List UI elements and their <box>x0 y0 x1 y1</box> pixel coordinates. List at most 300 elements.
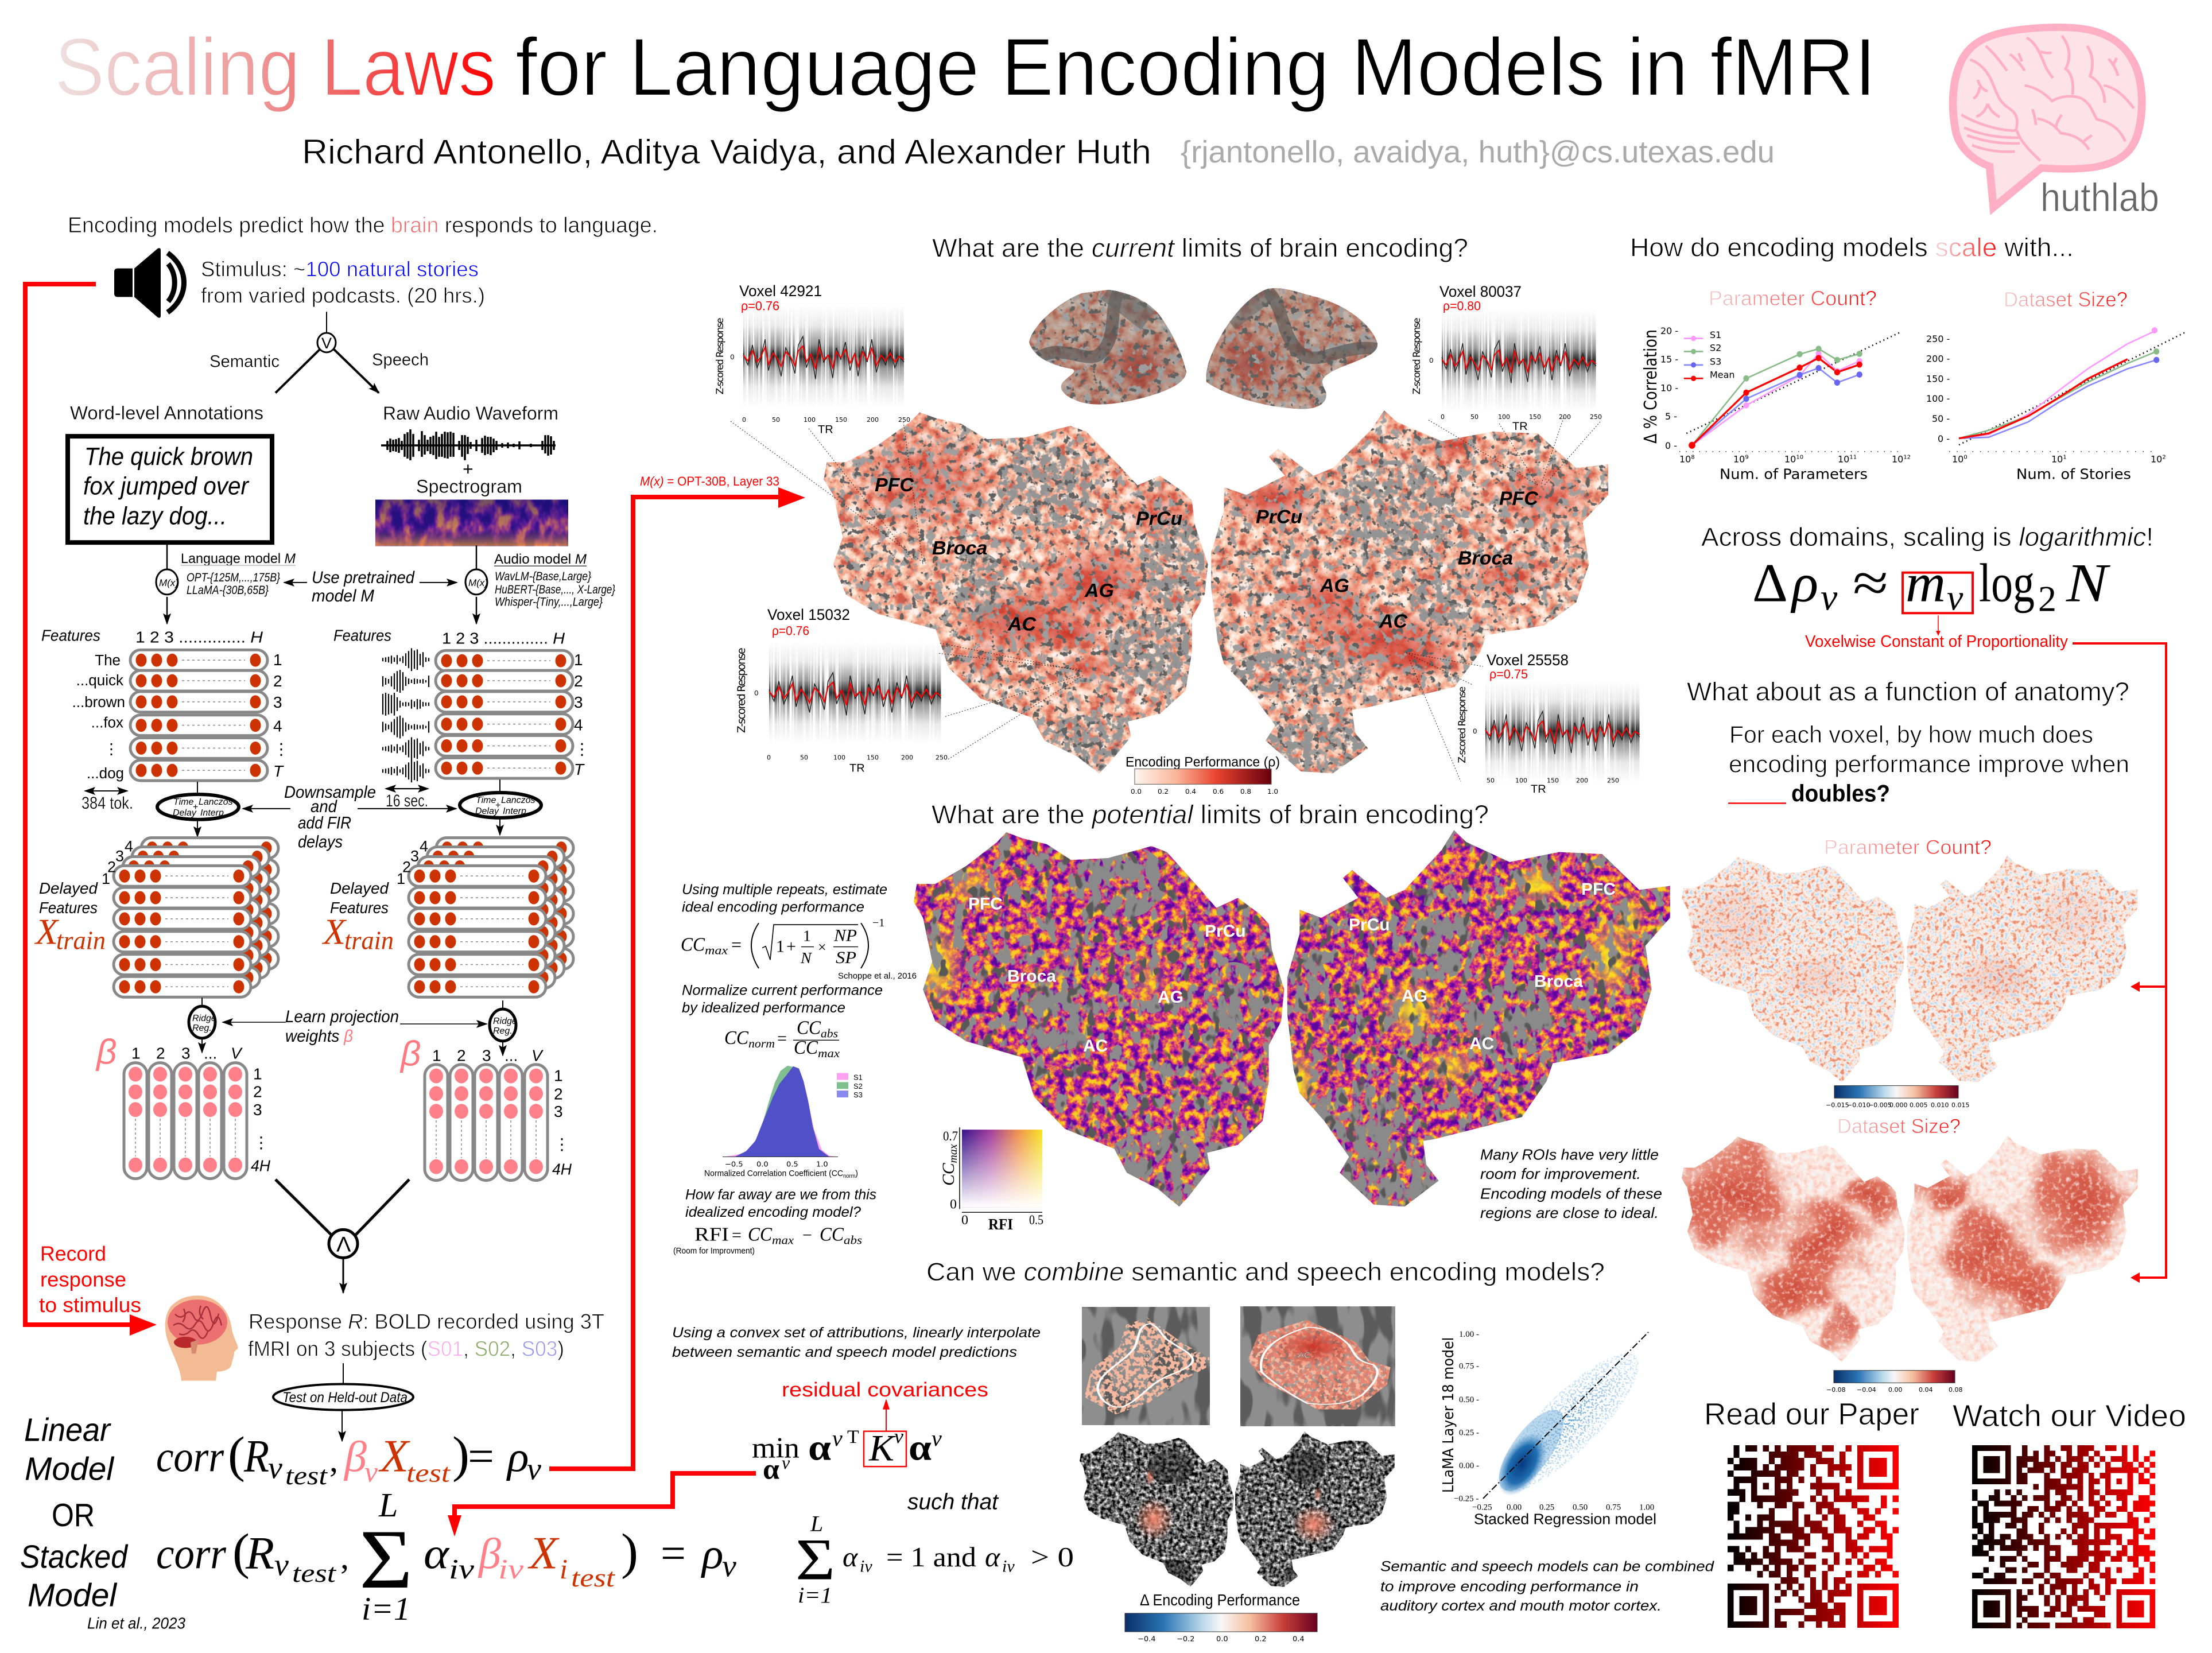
formula: CCmax: CC <box>681 934 705 955</box>
text: ideal encoding performance: Using multiple repeats, estimate <box>682 882 887 898</box>
model labels: Lin et al., 2023 <box>87 1615 186 1632</box>
note: many ROIs: Encoding models of these <box>1480 1186 1662 1202</box>
panel: language features matrix: 1 2 3 .............. H <box>135 628 263 646</box>
heading: spectrogram: Spectrogram <box>416 476 522 497</box>
inflated brain left <box>1029 289 1186 405</box>
panel: language features matrix: Features <box>41 626 100 644</box>
text: ideal encoding performance <box>682 882 887 915</box>
audio model node <box>465 545 488 624</box>
chart title: dataset size: Dataset Size? <box>2004 288 2128 311</box>
time delay node right: Lanczos <box>501 796 535 805</box>
voxel plot 15032: ρ=0.76 <box>772 624 809 638</box>
constraint formula: > 0 <box>1031 1541 1074 1573</box>
optimization objective: T <box>847 1427 859 1448</box>
voxel plot 80037: Voxel 80037 <box>1439 283 1522 300</box>
panel: audio features matrix: 1 2 3 .............. H <box>442 629 565 647</box>
auditory cortex close-up right: AC <box>1298 1351 1310 1360</box>
scatter plot: stacked vs LLaMA: −0.25 <box>1472 1503 1492 1512</box>
colorbar: encoding performance: 0.2 <box>1158 787 1169 796</box>
optimization objective: v <box>932 1426 942 1451</box>
colorbar: parameter count: 0.010 <box>1931 1101 1949 1109</box>
colorbar: parameter count: −0.015 <box>1826 1101 1849 1109</box>
scatter plot: stacked vs LLaMA <box>1440 1330 1656 1528</box>
equation: stacked model: ρ <box>701 1529 723 1578</box>
histogram: normalized correlation: S3 <box>853 1091 863 1099</box>
panel: delayed features right: Features <box>330 899 389 917</box>
formula: CCmax: + <box>786 937 796 956</box>
line chart: dataset size: 50 - <box>1932 413 1950 424</box>
panel: delayed features right: 2 <box>402 858 411 875</box>
panel: delayed features left: 2 <box>107 858 116 875</box>
equation: scaling law: N <box>2066 553 2111 613</box>
voxelwise constant label: Voxelwise Constant of Proportionality <box>1805 633 2069 651</box>
flatmap: dataset size scaling <box>1663 1127 2146 1366</box>
use pretrained model callout <box>284 568 457 606</box>
learn projection callout <box>223 1007 487 1046</box>
histogram: normalized correlation: 0.0 <box>756 1160 769 1169</box>
text: convex attributions: between semantic and speech model predictions <box>672 1344 1017 1360</box>
colorbar: dataset size: −0.04 <box>1857 1386 1876 1394</box>
line chart: parameter count: 10 <box>1838 454 1849 465</box>
scatter plot: stacked vs LLaMA: 0.50 <box>1573 1503 1588 1512</box>
voxel plot 15032: 0 <box>754 689 759 697</box>
formula: CCmax: = <box>731 935 742 954</box>
voxel plot 80037: 250 <box>1590 413 1602 421</box>
region labels: PrCu <box>1136 507 1183 529</box>
equation: stacked model: v <box>722 1549 736 1584</box>
panel: audio features matrix: Features <box>333 626 391 644</box>
voxel plot 25558 <box>1456 651 1640 796</box>
line chart: dataset size: 1 <box>2063 455 2067 461</box>
white region labels: AC <box>1469 1034 1494 1053</box>
text: per-voxel question: For each voxel, by how much does <box>1729 721 2093 748</box>
region labels: PrCu <box>1256 506 1303 527</box>
formula: CCnorm: CC <box>794 1037 818 1058</box>
audio model list: HuBERT-{Base,..., X-Large} <box>495 583 615 596</box>
panel: beta weights right: 1 <box>554 1067 563 1084</box>
white region labels: PrCu <box>1349 915 1390 934</box>
panel: beta weights right: ... <box>505 1047 518 1065</box>
voxel plot 42921: 250 <box>898 416 910 424</box>
line chart: parameter count: 10 <box>1784 454 1796 465</box>
learn projection callout: weights β <box>285 1027 353 1046</box>
formula: RFI: RFI <box>694 1224 729 1245</box>
line chart: dataset size: 10 <box>2051 454 2063 465</box>
line chart: dataset size: 250 - <box>1926 333 1950 344</box>
panel: audio features matrix: 4 <box>574 716 583 734</box>
voxel plot 15032: 0 <box>767 754 771 762</box>
formula: CCnorm: CC <box>724 1027 748 1049</box>
voxel plot 80037: TR <box>1512 420 1528 433</box>
line chart: parameter count: 8 <box>1691 455 1695 461</box>
voxel plot 80037: 150 <box>1529 413 1541 421</box>
panel: beta weights right: 2 <box>457 1047 466 1065</box>
voxel plot 42921: ρ=0.76 <box>741 299 779 313</box>
stimulus description: Stimulus: ~100 natural stories <box>201 258 479 281</box>
line chart: parameter count: 10 <box>1892 454 1903 465</box>
note: many ROIs: Many ROIs have very little <box>1480 1147 1659 1163</box>
downsample callout: add FIR <box>298 814 351 833</box>
voxel plot 42921: Z-scored Response <box>714 317 725 394</box>
line chart: dataset size: 100 - <box>1926 393 1950 404</box>
panel: language features matrix: 3 <box>273 693 282 711</box>
equation: stacked model: Σ <box>359 1513 413 1607</box>
equation: linear model: β <box>343 1432 367 1481</box>
panel: language features matrix: T <box>273 762 284 780</box>
equation: stacked model: test <box>292 1559 337 1588</box>
panel: beta weights right: 4H <box>552 1161 572 1178</box>
example sentence box: fox jumped over <box>83 472 250 500</box>
note: many ROIs: regions are close to ideal. <box>1480 1205 1659 1221</box>
line chart: dataset size: 0 <box>1963 455 1967 461</box>
voxel plot 80037: 200 <box>1559 413 1571 421</box>
text: normalize performance: by idealized performance <box>682 1000 845 1016</box>
line chart: parameter count: 11 <box>1849 455 1857 461</box>
line chart: parameter count: 10 - <box>1660 382 1678 393</box>
heading: combine models: Can we combine semantic and speech encoding models? <box>926 1258 1605 1286</box>
ridge regression node right <box>490 1000 517 1056</box>
text: how far away <box>685 1188 876 1220</box>
colorbar: delta encoding performance <box>1125 1591 1317 1644</box>
white region labels: Broca <box>1007 967 1056 986</box>
equation: stacked model: test <box>571 1563 616 1592</box>
formula: CCmax: max <box>705 944 728 957</box>
voxel plot 80037: Z-scored Response <box>1411 317 1422 394</box>
panel: audio features matrix: 3 <box>574 693 583 711</box>
optimization objective: α <box>909 1427 932 1468</box>
colorbar: delta encoding performance: 0.4 <box>1293 1635 1305 1644</box>
colorbar: delta encoding performance: 0.2 <box>1255 1635 1267 1644</box>
context window annotations: 16 sec. <box>386 791 428 810</box>
text: normalize performance: Normalize current performance <box>682 983 883 998</box>
region labels: Broca <box>1458 548 1513 569</box>
time delay node right: Delay <box>475 806 499 816</box>
panel: beta weights right: 3 <box>554 1103 563 1120</box>
spectrogram image <box>375 500 568 546</box>
text: combined models: auditory cortex and mouth motor cortex. <box>1380 1598 1662 1614</box>
histogram: normalized correlation: Normalized Correlation Coefficient (CC <box>704 1169 853 1178</box>
optimization objective: K <box>868 1428 897 1469</box>
line chart: parameter count: S2 <box>1710 343 1721 354</box>
voxel plot 15032: 150 <box>867 754 879 762</box>
flatmap: delta encoding performance <box>1076 1428 1398 1590</box>
scatter plot: stacked vs LLaMA: 1.00 - <box>1459 1330 1479 1339</box>
time delay node right <box>460 779 541 835</box>
voxel plot 25558: Z-scored Response <box>1456 686 1468 763</box>
white region labels: AG <box>1402 987 1427 1006</box>
panel: beta weights right: 2 <box>554 1085 563 1103</box>
author emails: {rjantonello, avaidya, huth}@cs.utexas.edu <box>1181 135 1775 169</box>
equation: stacked model: ( <box>232 1524 250 1580</box>
panel: delayed features right: Delayed <box>330 879 389 897</box>
white region labels: Broca <box>1534 972 1583 991</box>
text: how far away: idealized encoding model? <box>685 1205 861 1220</box>
merge node: Λ <box>336 1232 351 1256</box>
constraint formula <box>795 1511 1074 1608</box>
line chart: parameter count: Δ % Correlation <box>1641 329 1661 444</box>
logo wordmark: huthlab <box>2040 175 2159 220</box>
note: many ROIs: room for improvement. <box>1480 1166 1641 1182</box>
voxel plot 80037: 50 <box>1470 413 1478 421</box>
panel: language features matrix: ...quick <box>76 673 123 689</box>
title: for Language Encoding Models in fMRI <box>515 22 1876 113</box>
line chart: parameter count: 10 <box>1733 454 1745 465</box>
ridge regression node left: Reg. <box>192 1023 212 1033</box>
equation: linear model: test <box>285 1461 328 1490</box>
formula: CCnorm: abs <box>821 1027 838 1040</box>
constraint formula: iv <box>860 1558 873 1576</box>
formula: CCmax <box>681 917 917 981</box>
voxel plot 15032: 200 <box>901 754 913 762</box>
optimization objective: min <box>752 1432 800 1464</box>
model labels <box>20 1412 186 1632</box>
optimization objective: α <box>763 1453 779 1485</box>
formula: CCmax: −1 <box>872 917 884 929</box>
heading: potential limits: What are the potential limits of brain encoding? <box>932 800 1489 829</box>
voxel plot 42921: 200 <box>867 416 879 424</box>
equation: linear model: test <box>406 1458 451 1487</box>
icon: speaker <box>114 248 184 318</box>
colorbar: encoding performance <box>1126 755 1280 796</box>
equation: linear model: ( <box>228 1427 245 1483</box>
time delay node right: Interp. <box>503 806 529 816</box>
language model node <box>156 544 178 624</box>
voxel plot 25558: 150 <box>1547 777 1559 784</box>
chart title: parameter count: Parameter Count? <box>1709 287 1877 310</box>
text: per-voxel question: doubles? <box>1791 780 1890 806</box>
voxel plot 80037: 0 <box>1441 413 1445 421</box>
equation: scaling law: ≈ <box>1853 553 1888 613</box>
formula: CCmax: N <box>800 949 812 967</box>
equation: stacked model: ) <box>621 1524 638 1580</box>
colorbar: encoding performance: Encoding Performance (ρ) <box>1126 755 1280 770</box>
formula: RFI: − <box>802 1226 812 1244</box>
equation: scaling law <box>1752 553 2111 619</box>
equation: stacked model: , <box>340 1538 349 1576</box>
equation: stacked model: v <box>274 1548 289 1582</box>
audio model list: Audio model M <box>494 552 587 567</box>
residual covariances label <box>782 1379 988 1431</box>
voxel plot 15032 <box>735 606 948 775</box>
merge node <box>275 1179 409 1293</box>
colorbar: parameter count: −0.005 <box>1868 1101 1892 1109</box>
scatter plot: stacked vs LLaMA: 0.75 - <box>1459 1362 1479 1371</box>
formula: CCmax: 1 <box>776 937 785 956</box>
ridge regression node left: Ridge <box>192 1014 216 1023</box>
white region labels <box>968 880 1616 1056</box>
panel: delayed features left <box>34 838 278 997</box>
example sentence box: The quick brown <box>84 443 253 471</box>
equation: stacked model <box>156 1487 736 1627</box>
panel: delayed features right: 3 <box>410 847 419 864</box>
equation: stacked model: L <box>378 1487 398 1524</box>
language model list: LLaMA-{30B,65B} <box>187 584 269 597</box>
voxel plot 42921: 150 <box>835 416 847 424</box>
line chart: parameter count: 20 - <box>1660 325 1678 336</box>
equation: scaling law: 2 <box>2038 578 2056 619</box>
2D colormap legend: 0.5 <box>1029 1213 1043 1228</box>
panel: audio features matrix: 2 <box>574 672 583 690</box>
model labels: Model <box>28 1577 118 1613</box>
equation: linear model: ρ <box>506 1432 529 1481</box>
downsample callout <box>243 783 456 852</box>
equation: linear model: corr <box>156 1432 224 1481</box>
line chart: parameter count: Mean <box>1710 370 1735 380</box>
ridge regression node right: Reg. <box>493 1026 513 1036</box>
audio model list <box>494 552 615 609</box>
voxel plot 15032: 50 <box>800 754 808 762</box>
map title: dataset size: Dataset Size? <box>1837 1115 1961 1138</box>
formula: RFI: CC <box>748 1224 772 1245</box>
text: combined models <box>1380 1559 1714 1614</box>
histogram: normalized correlation <box>704 1066 863 1179</box>
formula: CCmax: Schoppe et al., 2016 <box>838 972 917 981</box>
voxel plot 42921 <box>714 282 910 436</box>
auditory cortex close-up left <box>1082 1307 1210 1425</box>
language model node: M(x) <box>159 577 178 588</box>
example sentence box: the lazy dog... <box>83 502 227 530</box>
voxel plot 15032: Voxel 15032 <box>767 606 850 623</box>
scatter plot: stacked vs LLaMA: Stacked Regression model <box>1474 1511 1656 1528</box>
formula: CCnorm: = <box>777 1029 787 1048</box>
panel: language features matrix: ...fox <box>91 715 123 731</box>
equation: stacked model: i=1 <box>362 1591 410 1627</box>
arrow: convex solve to stacked model <box>448 1473 756 1536</box>
equation: scaling law: ρ <box>1790 553 1818 613</box>
formula: CCnorm: CC <box>797 1018 821 1038</box>
time delay node left: Interp. <box>200 808 226 818</box>
formula: RFI: = <box>732 1226 742 1244</box>
voxel plot 80037: ρ=0.80 <box>1443 299 1481 313</box>
voxel plot 15032: TR <box>849 762 865 775</box>
voxel plot 42921: 100 <box>804 416 816 424</box>
panel: language features matrix: 2 <box>273 672 282 690</box>
stimulus to recording arrow <box>25 284 157 1336</box>
colorbar: encoding performance: 0.0 <box>1131 787 1142 796</box>
panel: beta weights left: V <box>231 1045 243 1062</box>
voxel plot 25558: 200 <box>1576 777 1588 784</box>
fork: semantic vs speech: Speech <box>372 351 429 370</box>
heading: scaling: How do encoding models scale with... <box>1630 232 2074 262</box>
panel: delayed features right: 1 <box>397 870 405 887</box>
panel: beta weights left <box>95 1033 271 1179</box>
colorbar: dataset size: 0.08 <box>1949 1386 1963 1394</box>
white region labels: PFC <box>968 895 1003 913</box>
formula: RFI <box>673 1224 862 1256</box>
QR code: video <box>1972 1448 2155 1625</box>
histogram: normalized correlation: S2 <box>853 1082 863 1091</box>
time delay node left: + <box>193 802 198 812</box>
2D colormap legend <box>939 1127 1043 1233</box>
optimization objective: v <box>894 1425 903 1448</box>
histogram: normalized correlation: −0.5 <box>725 1160 743 1169</box>
panel: language features matrix: ...dog <box>87 766 124 782</box>
panel: beta weights right: β <box>399 1034 421 1074</box>
time delay node right: + <box>495 801 500 810</box>
equation: linear model: = <box>468 1431 494 1482</box>
panel: beta weights left: ⋮ <box>253 1133 269 1152</box>
voxel plot 25558: 50 <box>1487 777 1495 784</box>
fork: semantic vs speech <box>209 312 429 393</box>
record response label: Record <box>40 1242 106 1265</box>
line chart: parameter count <box>1641 325 1911 483</box>
panel: language features matrix: ⋮ <box>104 740 119 758</box>
flatmap: current encoding performance <box>731 406 1613 781</box>
histogram: normalized correlation: 0.5 <box>786 1160 798 1169</box>
panel: delayed features left: 3 <box>115 847 124 864</box>
colorbar: encoding performance: 1.0 <box>1267 787 1278 796</box>
scatter plot: stacked vs LLaMA: 0.00 - <box>1459 1461 1479 1470</box>
example sentence box <box>68 436 272 542</box>
panel: beta weights left: 3 <box>181 1045 191 1062</box>
panel: delayed features left: X <box>34 911 60 952</box>
panel: delayed features right: train <box>344 926 394 955</box>
line chart: dataset size: 200 - <box>1926 354 1950 364</box>
downsample callout: Downsample <box>284 783 376 802</box>
ridge regression node left <box>189 998 216 1053</box>
colorbar: parameter count: 0.005 <box>1910 1101 1927 1109</box>
line chart: parameter count: S1 <box>1710 329 1721 340</box>
voxel plot 42921: TR <box>818 424 833 436</box>
equation: linear model: v <box>527 1452 541 1487</box>
voxelwise constant label <box>1805 615 2069 651</box>
heading: raw audio waveform: Raw Audio Waveform <box>383 402 558 424</box>
region labels: AG <box>1320 575 1349 596</box>
equation: scaling law: m <box>1906 553 1946 613</box>
time delay node left: Delay <box>173 808 197 818</box>
2D colormap legend: 0 <box>961 1213 968 1228</box>
panel: beta weights left: 2 <box>253 1082 262 1100</box>
fork: semantic vs speech: Semantic <box>209 352 280 371</box>
heading: read our paper: Read our Paper <box>1704 1397 1919 1431</box>
formula: RFI: (Room for Improvment) <box>673 1247 755 1256</box>
line chart: parameter count: 9 <box>1745 455 1749 461</box>
equation: scaling law: v <box>1947 577 1963 618</box>
scatter plot: stacked vs LLaMA: 0.25 - <box>1459 1429 1479 1437</box>
auditory cortex close-up right <box>1240 1306 1395 1426</box>
constraint formula: i=1 <box>798 1583 832 1608</box>
formula: CCnorm: max <box>818 1046 840 1060</box>
voxel plot 15032: Z-scored Response <box>735 647 748 733</box>
equation: stacked model: = <box>661 1528 686 1578</box>
histogram: normalized correlation: norm <box>843 1173 855 1179</box>
record response label: to stimulus <box>39 1293 141 1317</box>
equation: scaling law: v <box>1821 576 1838 618</box>
formula: RFI: CC <box>820 1224 844 1245</box>
panel: delayed features left: train <box>56 926 106 955</box>
model labels: Stacked <box>20 1539 129 1575</box>
equation: stacked model: iv <box>449 1554 474 1585</box>
white region labels: PFC <box>1581 880 1616 899</box>
title: Scaling Laws <box>55 22 496 113</box>
panel: beta weights right: 1 <box>432 1047 441 1065</box>
such that: such that <box>907 1489 999 1514</box>
line chart: dataset size: 0 - <box>1938 433 1950 444</box>
histogram: normalized correlation: 1.0 <box>816 1160 828 1169</box>
voxel plot 80037: 100 <box>1498 413 1510 421</box>
equation: stacked model: α <box>424 1529 450 1578</box>
equation: linear model: v <box>268 1451 282 1485</box>
language model list <box>181 551 296 597</box>
equation: linear model: v <box>364 1456 378 1488</box>
line chart: dataset size: Num. of Stories <box>2016 466 2131 483</box>
equation: stacked model: corr <box>156 1529 227 1578</box>
panel: beta weights left: 4H <box>251 1157 271 1175</box>
scatter plot: stacked vs LLaMA: 0.25 <box>1539 1503 1554 1512</box>
white region labels: AG <box>1158 988 1183 1007</box>
line chart: parameter count: 5 - <box>1665 411 1677 422</box>
region labels: AG <box>1084 580 1114 602</box>
